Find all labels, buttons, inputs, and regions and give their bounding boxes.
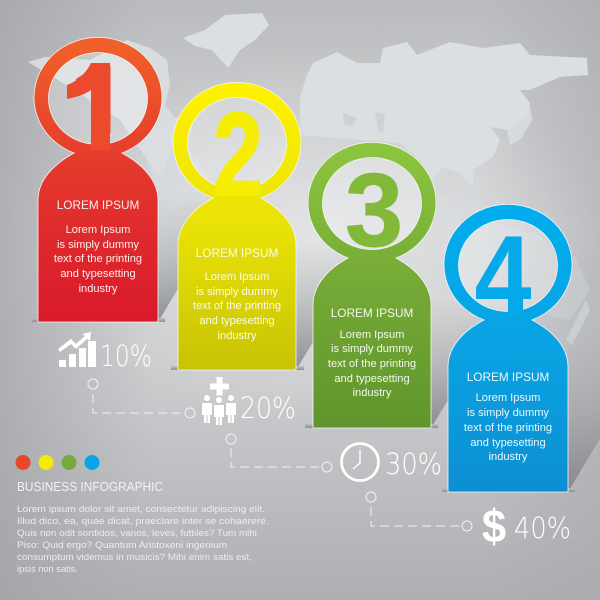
body text 4: and typesetting: [470, 437, 546, 449]
panel 2: yellow step: [171, 82, 304, 370]
body text 4: is simply dummy: [467, 407, 549, 419]
body text 1: text of the printing: [54, 253, 142, 265]
green ring and body: [308, 142, 436, 428]
icon: rising bar chart: [58, 332, 96, 367]
body text 4: Lorem Ipsum: [476, 392, 540, 404]
blue ring and body: [444, 204, 572, 492]
body text 1: [54, 224, 142, 295]
description text: [17, 504, 269, 575]
number 3: 3: [345, 153, 403, 269]
stat: 20%: [202, 377, 296, 425]
body text 3: [328, 329, 416, 399]
icon: clock: [342, 444, 378, 480]
panel 3: green step: [305, 142, 438, 428]
number 1: 1: [68, 43, 132, 170]
number 2: 2: [213, 90, 263, 221]
description text: consumptum videmus in musicis? Mihi enim satis est,: [17, 552, 252, 563]
value 40%: 40%: [514, 511, 571, 545]
body text 4: industry: [489, 451, 528, 463]
colour legend dots: [16, 455, 100, 470]
body text 2: [193, 271, 281, 342]
number 1: [67, 63, 110, 150]
body text 4: [464, 392, 552, 463]
body text 1: and typesetting: [60, 268, 136, 280]
body text 2: and typesetting: [199, 315, 275, 327]
slit shadow 2: [171, 366, 304, 370]
body text 3: industry: [353, 387, 392, 399]
body text 1: industry: [79, 283, 118, 295]
value 20%: 20%: [240, 391, 296, 425]
slit shadow 4: [442, 488, 575, 492]
red ring and body: [34, 37, 162, 322]
description text: Quis non odit sordidos, vanos, leves, futtiles? Tum mihi: [17, 528, 257, 539]
yellow ring and body: [173, 82, 301, 370]
value 30%: 30%: [385, 447, 442, 481]
connector 2: [226, 434, 332, 472]
description text: Illud dico, ea, quae dicat, praeclare inter se cohaerere.: [17, 516, 269, 527]
connector 1: [88, 379, 195, 418]
body text 2: text of the printing: [193, 300, 281, 312]
description text: Lorem ipsum dolor sit amet, consectetur adipiscing elit.: [17, 504, 265, 515]
stat: 10%: [58, 332, 152, 373]
value 10%: 10%: [100, 339, 152, 373]
heading 4: LOREM IPSUM: [467, 370, 549, 384]
light ring holes: [48, 51, 558, 312]
body text 4: text of the printing: [464, 422, 552, 434]
title: BUSINESS INFOGRAPHIC: [17, 479, 163, 494]
heading 3: LOREM IPSUM: [331, 306, 413, 320]
icon: three people with plus: [202, 377, 236, 425]
stat: 30%: [342, 444, 442, 481]
panel 4: blue step: [442, 204, 575, 492]
icon: dollar sign: $: [482, 500, 506, 552]
panel 1: red step: [32, 37, 165, 322]
connector 3: [366, 492, 472, 531]
stat: 40%: [482, 500, 571, 552]
slit shadow 3: [305, 424, 438, 428]
heading 1: LOREM IPSUM: [57, 198, 139, 212]
description text: ipsis non satis.: [17, 564, 78, 575]
body text 1: Lorem Ipsum: [66, 224, 130, 236]
body text 3: Lorem Ipsum: [340, 329, 404, 341]
world map: [28, 13, 590, 345]
number 4: 4: [474, 212, 532, 339]
body text 2: industry: [218, 330, 257, 342]
slit shadow 1: [32, 318, 165, 322]
body text 1: is simply dummy: [57, 239, 139, 251]
body text 3: is simply dummy: [331, 343, 413, 355]
body text 2: is simply dummy: [196, 286, 278, 298]
heading 2: LOREM IPSUM: [196, 246, 278, 260]
diagonal shadows: [158, 190, 600, 492]
body text 3: text of the printing: [328, 358, 416, 370]
description text: Piso: Quid ergo? Quantum Aristoxeni ingenium: [17, 540, 227, 551]
body text 2: Lorem Ipsum: [205, 271, 269, 283]
body text 3: and typesetting: [334, 373, 410, 385]
